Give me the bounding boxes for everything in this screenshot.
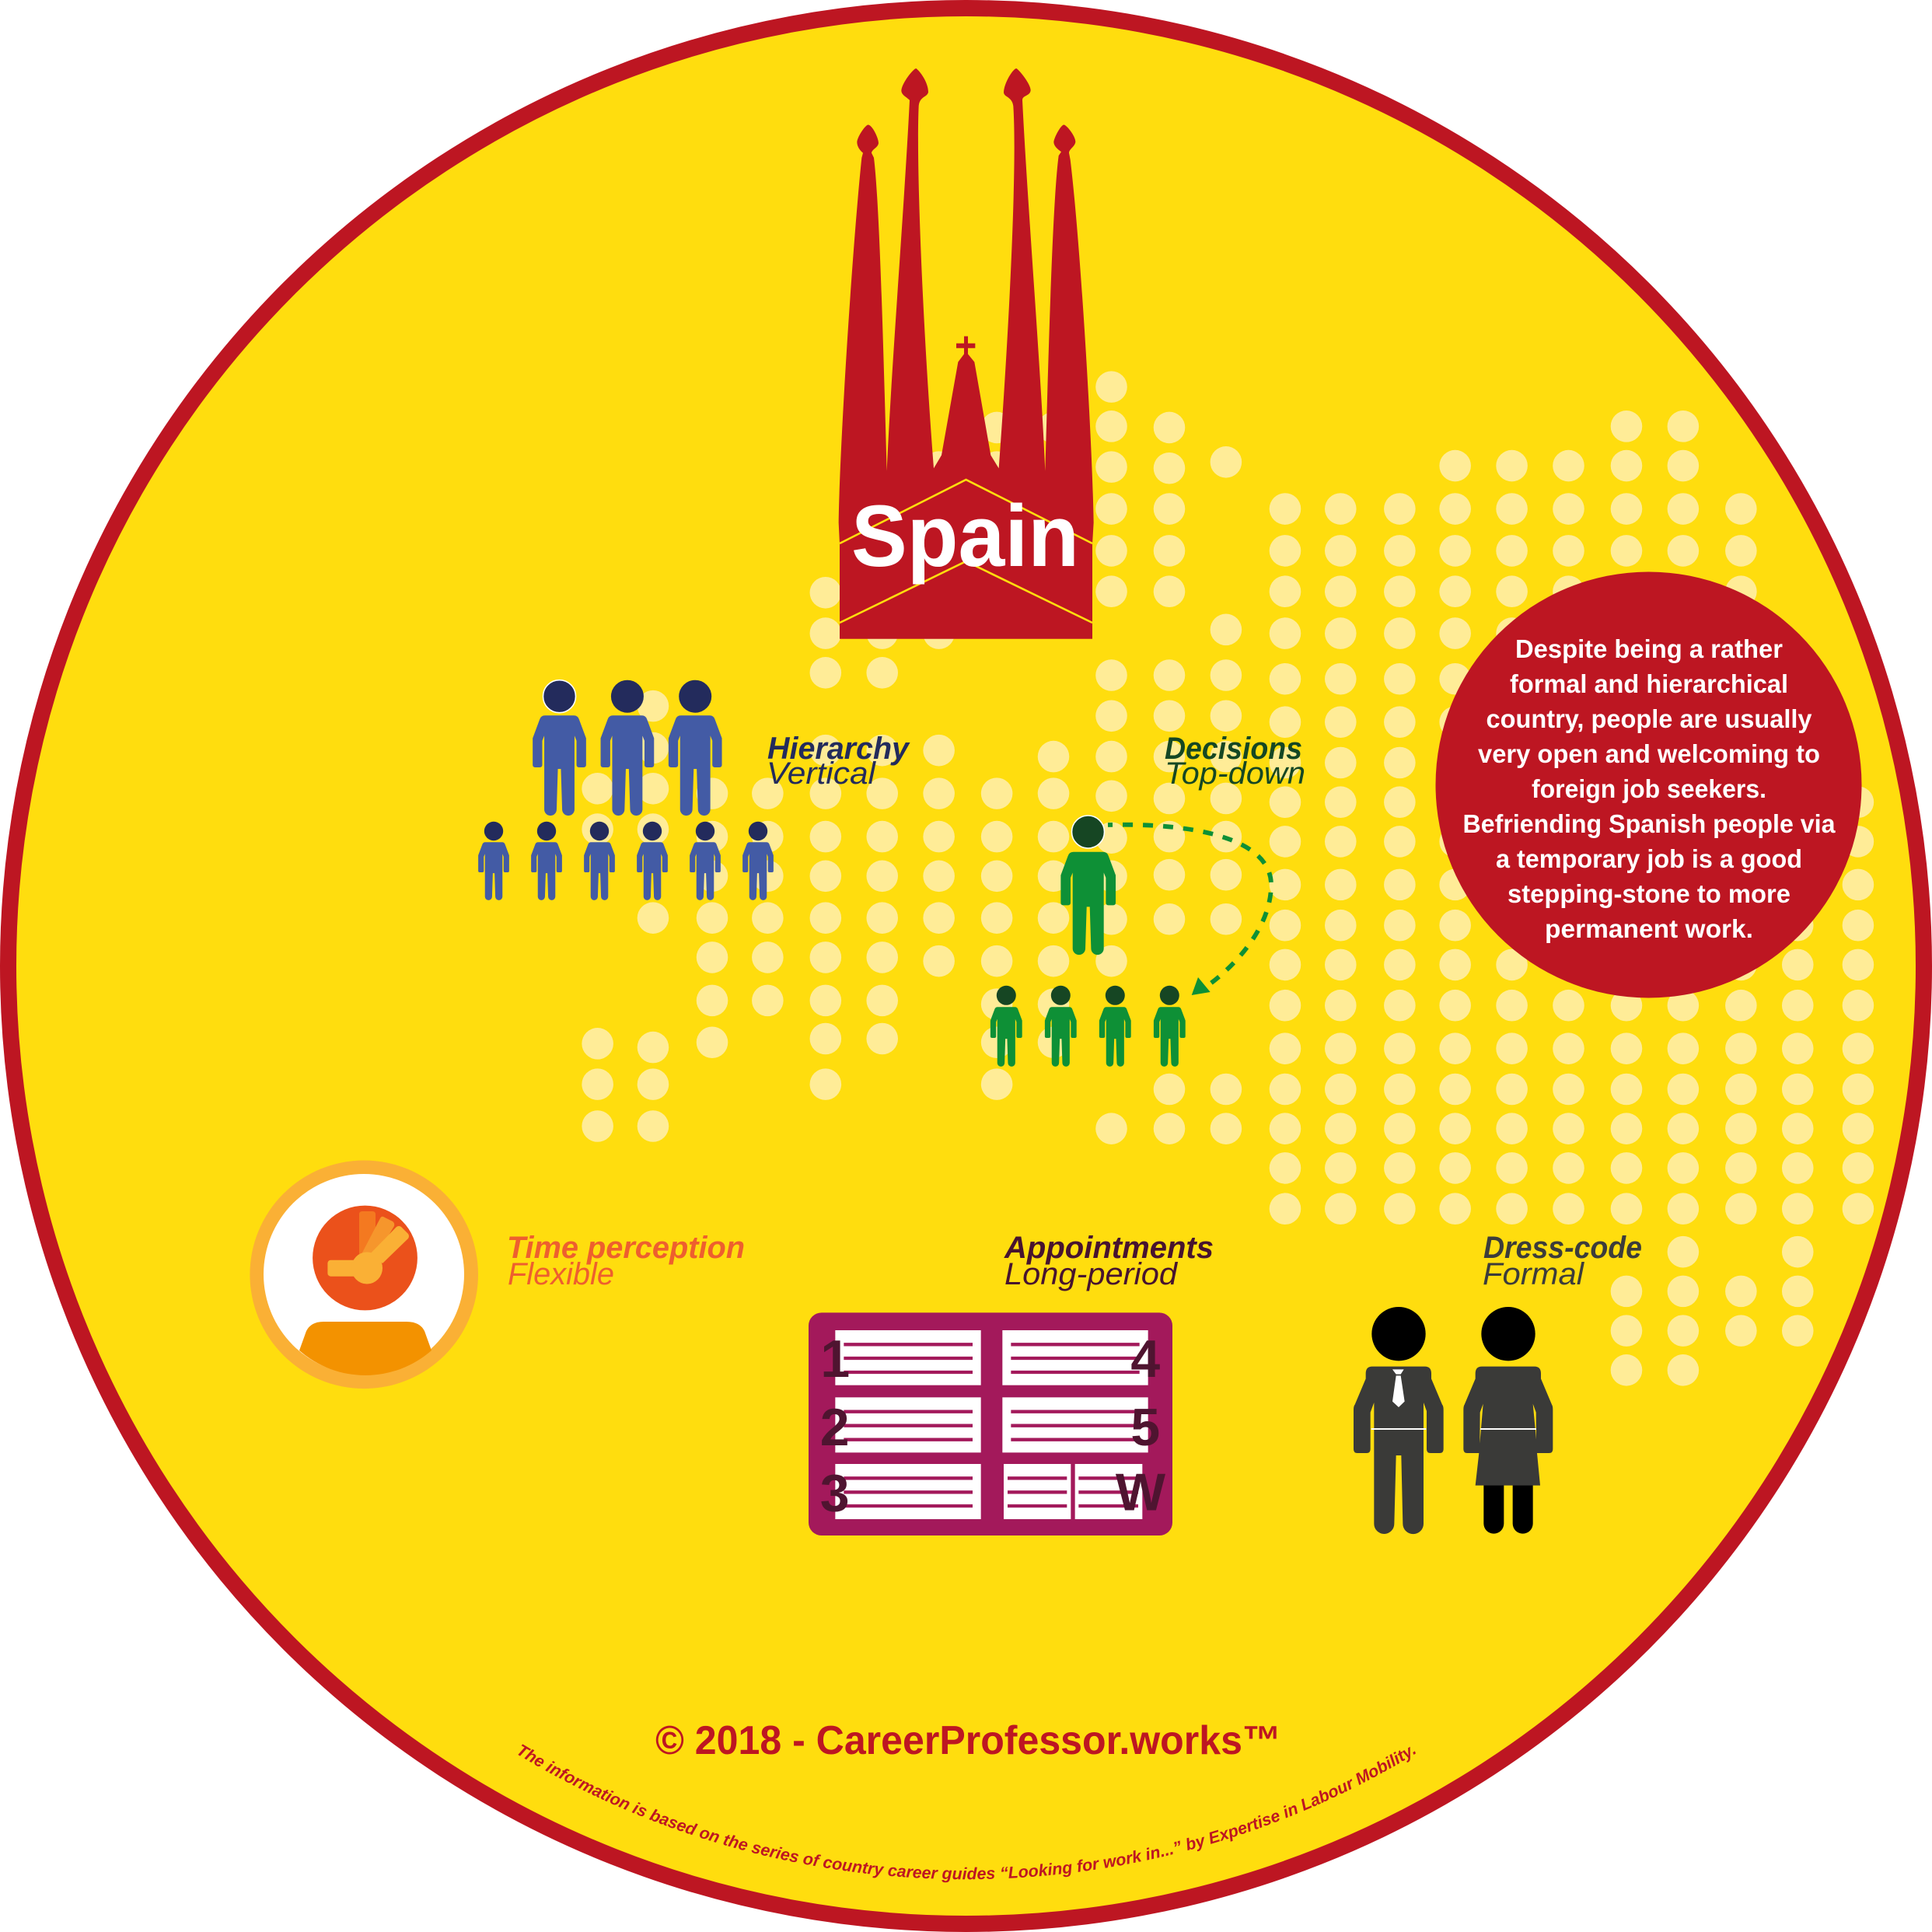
icon: weekly calendar: 5	[1130, 1398, 1160, 1457]
heading: Appointments: Long-period	[1004, 1257, 1179, 1291]
icon: Sagrada Familia towers	[839, 68, 1094, 639]
callout: red circle with advice: formal and hierarchical	[1510, 669, 1788, 698]
callout: red circle with advice: country, people are usually	[1487, 704, 1812, 733]
heading: Decisions: Decisions	[1165, 732, 1302, 766]
heading: Appointments	[1004, 1231, 1214, 1291]
heading: Time perception: Flexible	[508, 1257, 614, 1291]
callout: red circle with advice: permanent work.	[1545, 914, 1753, 943]
callout: red circle with advice: stepping-stone to more	[1508, 879, 1791, 908]
heading: Appointments: Appointments	[1004, 1231, 1214, 1265]
heading: Hierarchy: Hierarchy	[767, 732, 910, 766]
icon: weekly calendar: 3	[820, 1463, 850, 1522]
icon: weekly calendar	[809, 1312, 1172, 1535]
dotted world map	[598, 387, 1858, 1370]
icon: weekly calendar: W	[1116, 1463, 1166, 1522]
heading: Dress-code	[1483, 1231, 1642, 1291]
callout: red circle with advice: a temporary job is a good	[1496, 844, 1802, 873]
heading: Hierarchy	[767, 732, 910, 791]
icon: weekly calendar: 1	[820, 1329, 850, 1389]
title: Spain: Spain	[851, 487, 1079, 585]
copyright line: © 2018 - CareerProfessor.works™	[655, 1718, 1281, 1763]
icon: formal man and woman	[1354, 1307, 1553, 1534]
heading: Dress-code: Dress-code	[1483, 1231, 1642, 1265]
heading: Dress-code: Formal	[1483, 1257, 1584, 1291]
heading: Time perception: Time perception	[507, 1231, 745, 1265]
heading: Time perception	[507, 1231, 745, 1291]
heading: Hierarchy: Vertical	[767, 756, 876, 791]
curved source note: The information is based on the series of country career guides “Looking for work in...” by Expertise in Labour Mobility.	[518, 1744, 1416, 1883]
icon: weekly calendar: 2	[820, 1398, 850, 1457]
heading: Decisions	[1165, 732, 1305, 791]
callout: red circle with advice	[1435, 572, 1861, 998]
icon: weekly calendar: 4	[1130, 1329, 1160, 1389]
icon: hierarchy people	[478, 680, 774, 900]
heading: Decisions: Top-down	[1165, 756, 1305, 791]
callout: red circle with advice: Befriending Spanish people via	[1463, 809, 1836, 838]
icon: clock head person	[250, 1160, 478, 1389]
callout: red circle with advice: foreign job seekers.	[1532, 774, 1766, 803]
callout: red circle with advice: very open and welcoming to	[1478, 739, 1820, 768]
icon: decisions people with arrow	[990, 816, 1271, 1067]
callout: red circle with advice: Despite being a rather	[1515, 634, 1783, 663]
